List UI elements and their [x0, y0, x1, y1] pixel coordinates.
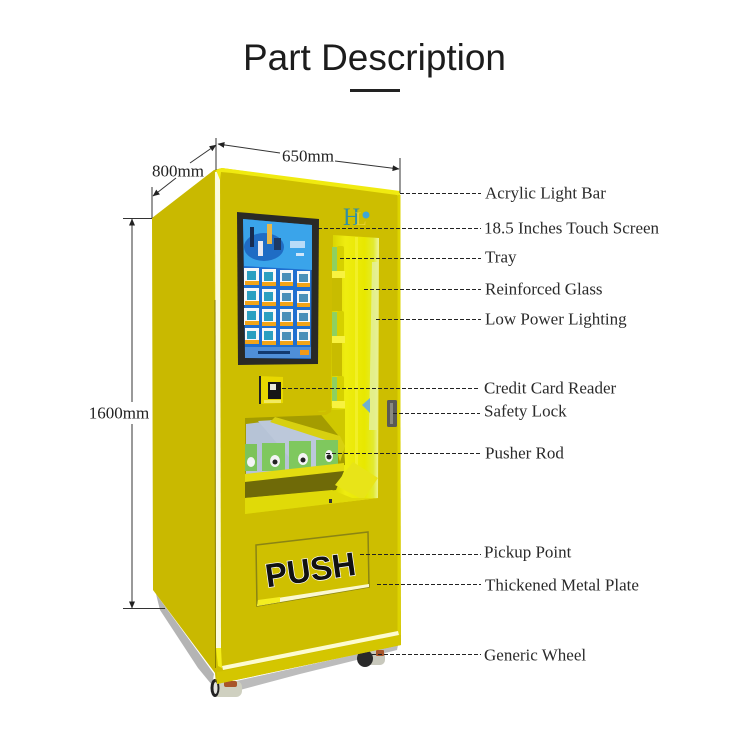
window reflection [355, 237, 358, 490]
pickup flap [335, 462, 378, 500]
light arrow sticker [362, 398, 370, 413]
screen header [243, 219, 312, 270]
tray 3 [332, 343, 345, 408]
corner seam [214, 300, 216, 668]
dimension: 800mm: 800mm [152, 162, 204, 180]
label: Safety Lock: Safety Lock [484, 402, 567, 420]
logo: H [343, 204, 360, 231]
dimension: 800mm [152, 145, 216, 218]
products [245, 440, 338, 471]
shelf [245, 463, 344, 482]
tray 2 [332, 278, 345, 343]
logo: L [355, 209, 367, 230]
safety lock [387, 400, 397, 427]
screen tile grid [244, 268, 310, 345]
upper window [245, 235, 379, 514]
floor shadow: side [156, 594, 214, 685]
touch screen bezel [237, 212, 319, 365]
product rods [246, 422, 312, 475]
floor shadow: front [232, 645, 398, 690]
title underline [350, 89, 400, 92]
push text: PUSH [263, 545, 358, 594]
bottom plinth [217, 635, 401, 684]
panel edge below screen [245, 406, 332, 418]
side panel [152, 170, 216, 684]
top light bar [216, 168, 400, 201]
vending machine [152, 168, 401, 697]
label: Reinforced Glass: Reinforced Glass [485, 280, 603, 298]
right wall of compartment [318, 409, 345, 462]
front panel [214, 168, 401, 684]
push panel [256, 532, 369, 606]
label: 18.5 Inches Touch Screen: 18.5 Inches Touch Screen [484, 218, 660, 238]
sill hole [329, 499, 332, 503]
touch screen display [243, 219, 312, 359]
lower sill [245, 490, 378, 514]
logo [343, 204, 370, 231]
dimension: 650mm [216, 138, 400, 193]
bottom light strip [222, 631, 399, 670]
label: Low Power Lighting: Low Power Lighting [485, 310, 627, 328]
window mottled edge [369, 262, 378, 430]
label: Tray: Tray [485, 248, 517, 266]
corner light strip [215, 171, 221, 648]
dimension: 650mm: 650mm [282, 146, 334, 166]
wheel: front left [210, 679, 242, 697]
dark cavity [245, 471, 344, 498]
title: Part Description [243, 37, 506, 78]
credit card reader [259, 376, 283, 404]
screen people illustration [244, 224, 305, 261]
push panel light [257, 584, 369, 606]
label: Credit Card Reader: Credit Card Reader [484, 378, 617, 398]
label: Pickup Point: Pickup Point [484, 542, 572, 562]
screen bottom bar [245, 347, 311, 358]
label: Pusher Rod: Pusher Rod [485, 444, 564, 462]
dimension: 1600mm: 1600mm [89, 404, 149, 422]
upper back wall [270, 417, 345, 462]
wheel: front right [357, 650, 385, 667]
label: Acrylic Light Bar: Acrylic Light Bar [485, 184, 606, 202]
lower compartment interior [245, 411, 345, 480]
right light bar [398, 195, 400, 635]
label: Generic Wheel: Generic Wheel [484, 646, 586, 664]
tray 1 [332, 246, 345, 278]
label: Thickened Metal Plate: Thickened Metal Plate [485, 576, 639, 594]
